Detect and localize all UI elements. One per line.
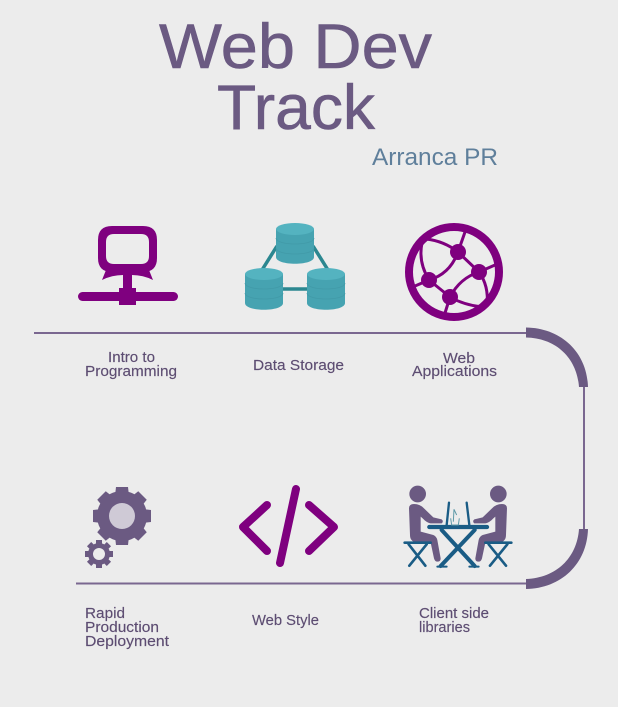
label: Client side libraries: [419, 605, 489, 636]
icon: data storage: [245, 223, 345, 310]
glass: [451, 509, 459, 525]
top timeline line: [34, 332, 527, 334]
right connector line: [583, 386, 585, 531]
icon: gears: [85, 487, 151, 568]
title: Web Dev: [159, 12, 433, 82]
label: Web Applications: Applications: [412, 363, 497, 380]
bottom curve: [526, 529, 588, 589]
label: Intro to Programming: Intro to: [108, 349, 155, 366]
icon: code brackets: [243, 489, 334, 563]
icon: two people at table: [405, 486, 511, 567]
label: Web Applications: [412, 350, 497, 380]
label: Intro to Programming: [85, 349, 177, 380]
label: Client side libraries: Client side: [419, 605, 489, 622]
title: Track: [217, 73, 375, 143]
label: Rapid Production Deployment: Deployment: [85, 633, 170, 650]
bottom timeline line: [76, 582, 527, 584]
label: Data Storage: Data Storage: [253, 357, 344, 374]
label: Rapid Production Deployment: [85, 605, 170, 650]
icon: networked computer: [78, 226, 178, 305]
label: Rapid Production Deployment: Rapid: [85, 605, 125, 622]
label: Intro to Programming: Programming: [85, 363, 177, 380]
icon: globe network: [409, 227, 499, 317]
label: Rapid Production Deployment: Production: [85, 619, 159, 636]
label: Web Style: Web Style: [252, 612, 319, 629]
label: Client side libraries: libraries: [419, 619, 470, 636]
title: [159, 12, 433, 143]
top curve: [526, 328, 588, 387]
person right: [473, 486, 507, 562]
label: Web Applications: Web: [443, 350, 475, 367]
person left: [409, 486, 443, 562]
subtitle: Arranca PR: [372, 144, 498, 171]
table and stools: [405, 503, 511, 567]
